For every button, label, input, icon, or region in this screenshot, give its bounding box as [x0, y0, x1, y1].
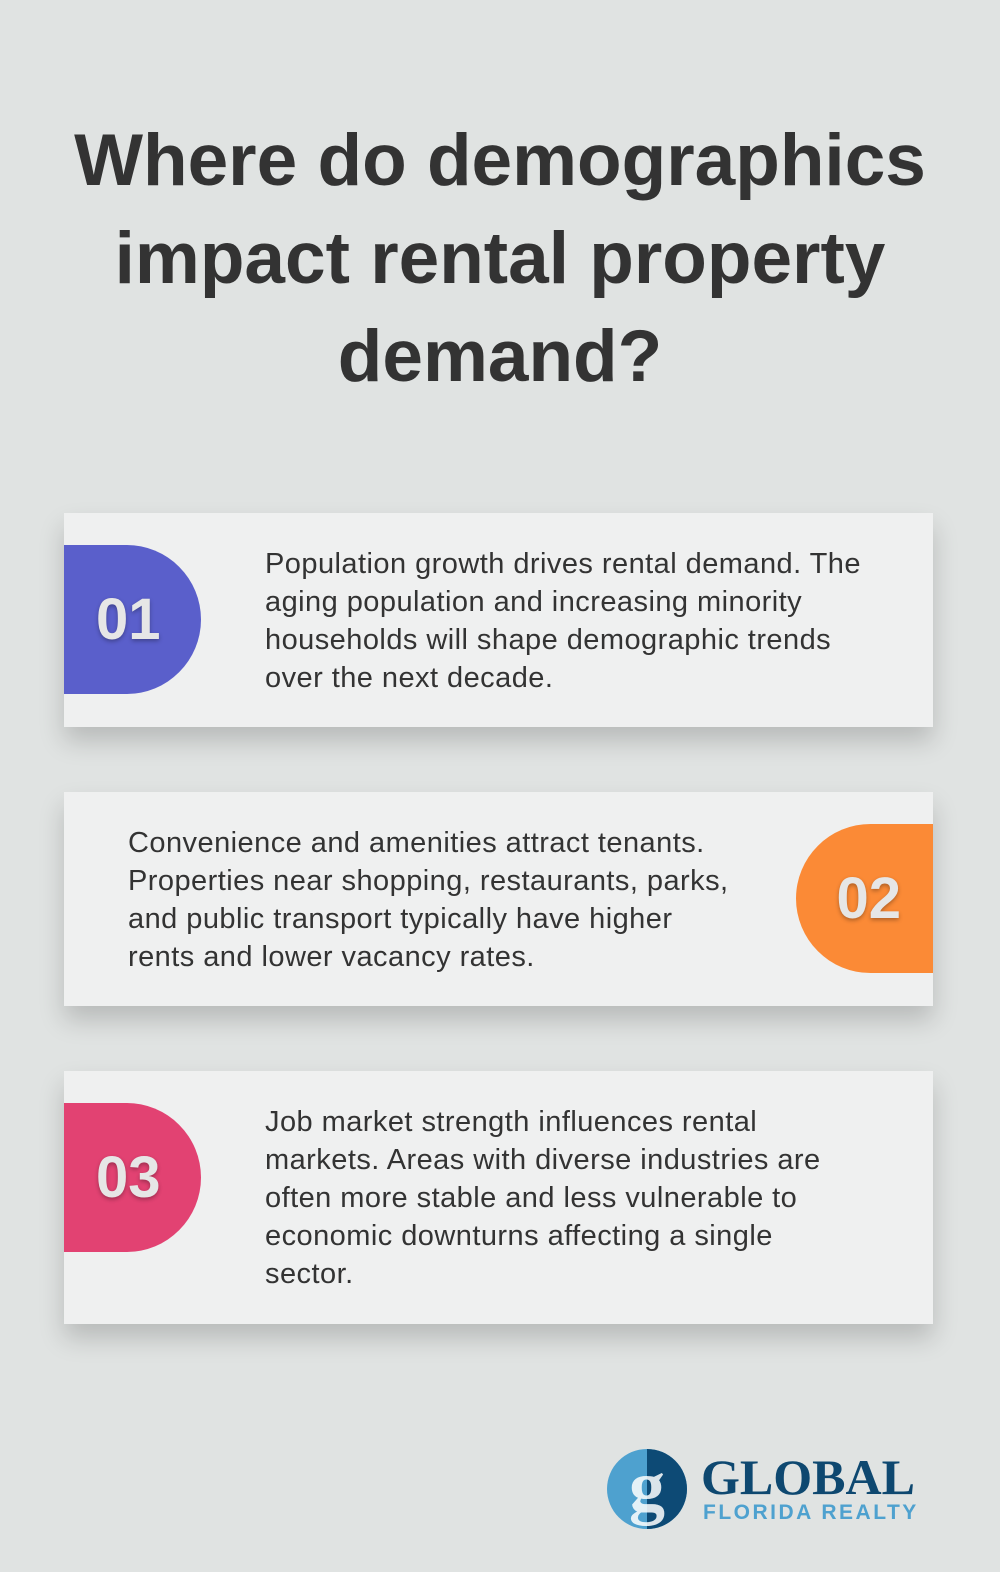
- text 2: Convenience and amenities attract tenants.: [128, 827, 705, 859]
- card 1: [64, 513, 933, 727]
- badge 01: [64, 545, 201, 694]
- text 2: [128, 827, 729, 973]
- badge 01: 01: [96, 587, 161, 652]
- logo icon: [607, 1448, 687, 1529]
- text 1: households will shape demographic trends: [265, 624, 831, 656]
- text 3: often more stable and less vulnerable to: [265, 1182, 797, 1214]
- logo: [607, 1448, 919, 1529]
- text 2: rents and lower vacancy rates.: [128, 941, 535, 973]
- title: [74, 120, 926, 397]
- text 1: over the next decade.: [265, 662, 553, 694]
- title: demand?: [338, 316, 662, 397]
- text 3: Job market strength influences rental: [265, 1106, 757, 1138]
- card 3: [64, 1071, 933, 1324]
- text 2: and public transport typically have higher: [128, 903, 672, 935]
- text 3: economic downturns affecting a single: [265, 1220, 773, 1252]
- logo: FLORIDA REALTY: [703, 1501, 919, 1524]
- text 3: markets. Areas with diverse industries are: [265, 1144, 821, 1176]
- text 3: sector.: [265, 1258, 354, 1290]
- badge 02: 02: [836, 866, 901, 931]
- text 2: Properties near shopping, restaurants, parks,: [128, 865, 729, 897]
- logo icon: g: [629, 1448, 665, 1526]
- card 2: [64, 792, 933, 1006]
- badge 03: 03: [96, 1145, 161, 1210]
- text 1: aging population and increasing minority: [265, 586, 802, 618]
- text 1: [265, 548, 861, 694]
- badge 02: [796, 824, 933, 973]
- title: impact rental property: [115, 218, 885, 299]
- title: Where do demographics: [74, 120, 926, 201]
- text 3: [265, 1106, 821, 1290]
- badge 03: [64, 1103, 201, 1252]
- text 1: Population growth drives rental demand. The: [265, 548, 861, 580]
- logo text: GLOBAL: [701, 1449, 915, 1505]
